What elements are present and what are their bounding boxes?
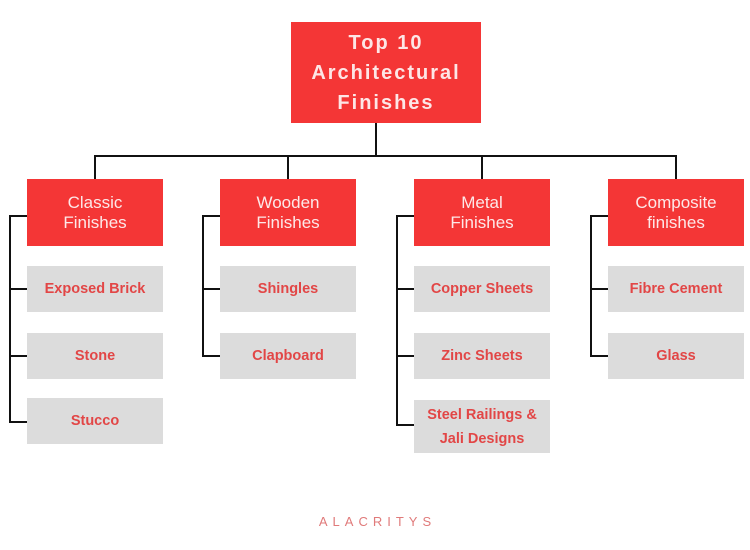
title: Architectural [311,62,461,84]
category: Metal Finishes: Metal [461,192,503,212]
title: Finishes [337,92,435,114]
item: Steel Railings & Jali Designs: Jali Designs [440,430,524,446]
category: Classic Finishes: Classic [68,192,122,212]
category: Wooden Finishes: Finishes [256,212,320,232]
item: Steel Railings & Jali Designs [414,400,550,453]
item: Shingles: Shingles [258,281,318,297]
item: Steel Railings & Jali Designs: Steel Railings & [427,406,537,422]
item: Stucco: Stucco [71,413,119,429]
item: Stone [27,333,163,379]
category: Metal Finishes [414,179,550,246]
item: Glass [608,333,744,379]
item: Exposed Brick: Exposed Brick [45,281,145,297]
item: Exposed Brick [27,266,163,312]
item: Fibre Cement [608,266,744,312]
category: Composite finishes [608,179,744,246]
category: Classic Finishes: Finishes [63,212,127,232]
category: Composite finishes: Composite [635,192,717,212]
category: Wooden Finishes [220,179,356,246]
title: Top 10 [349,32,423,54]
item: Stucco [27,398,163,444]
item: Clapboard: Clapboard [252,348,324,364]
item: Shingles [220,266,356,312]
item: Stone: Stone [75,348,115,364]
item: Copper Sheets: Copper Sheets [431,281,533,297]
item: Fibre Cement: Fibre Cement [630,281,722,297]
item: Clapboard [220,333,356,379]
category: Classic Finishes [27,179,163,246]
category: Composite finishes: finishes [647,212,705,232]
title [291,22,481,123]
category: Wooden Finishes: Wooden [256,192,320,212]
item: Copper Sheets [414,266,550,312]
footer brand: ALACRITYS [319,514,436,529]
item: Glass: Glass [656,348,696,364]
item: Zinc Sheets: Zinc Sheets [441,348,523,364]
category: Metal Finishes: Finishes [450,212,514,232]
item: Zinc Sheets [414,333,550,379]
